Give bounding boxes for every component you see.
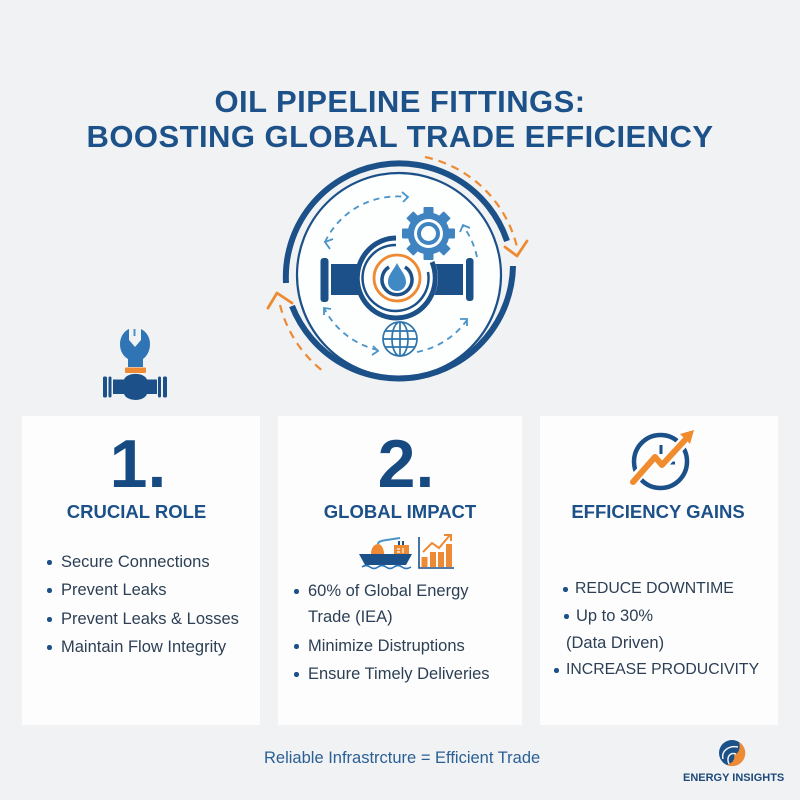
heading: CRUCIAL ROLE	[67, 501, 206, 522]
number 1: 1.	[110, 426, 166, 502]
footer tagline: Reliable Infrastrcture = Efficient Trade	[264, 749, 540, 767]
panel: efficiency gains	[540, 416, 778, 725]
bullet list: Minimize Distruptions	[308, 637, 465, 655]
pipe with flanges	[320, 258, 474, 302]
icon: oil drop	[388, 263, 406, 291]
bullet list: Secure Connections	[61, 553, 210, 571]
heading: GLOBAL IMPACT	[324, 501, 476, 522]
outer ring arcs	[286, 163, 513, 378]
wordmark: ENERGY INSIGHTS	[683, 772, 784, 784]
central fitting rings	[356, 237, 438, 319]
title: OIL PIPELINE FITTINGS:	[214, 84, 586, 119]
central pipeline diagram	[266, 156, 528, 382]
heading: EFFICIENCY GAINS	[571, 501, 745, 522]
blue dashed flow arrows	[324, 192, 477, 355]
bullet list: Trade (IEA)	[308, 608, 393, 626]
bullet list: Prevent Leaks & Losses	[61, 610, 239, 628]
bullet list	[554, 580, 759, 678]
bullet list: 60% of Global Energy	[308, 582, 469, 600]
orange dashed arrows	[268, 157, 527, 372]
bullet list: Prevent Leaks	[61, 581, 166, 599]
ship	[359, 538, 412, 568]
logo: energy insights	[683, 740, 784, 784]
growth chart	[419, 535, 454, 568]
title	[87, 84, 713, 154]
bullet list: Ensure Timely Deliveries	[308, 665, 490, 683]
bullet list: (Data Driven)	[566, 634, 664, 652]
bullet list: Maintain Flow Integrity	[61, 638, 226, 656]
icon: wrench on pipe	[103, 329, 167, 400]
bullet list: INCREASE PRODUCIVITY	[566, 661, 759, 678]
icon: clock with rising arrow	[630, 430, 694, 490]
icon: gear	[402, 207, 455, 260]
icon: swirl	[719, 740, 746, 766]
bullet list: REDUCE DOWNTIME	[575, 580, 734, 597]
number 2: 2.	[378, 426, 434, 502]
title: BOOSTING GLOBAL TRADE EFFICIENCY	[87, 119, 713, 154]
bullet list	[47, 553, 239, 656]
panel: crucial role	[22, 416, 260, 725]
bullet list: Up to 30%	[576, 607, 653, 625]
inner white disc and ring	[297, 173, 501, 377]
icon: globe	[383, 322, 417, 356]
bullet list	[294, 582, 490, 683]
panel: global impact	[278, 416, 522, 725]
icon: cargo ship and growth chart	[359, 534, 454, 570]
